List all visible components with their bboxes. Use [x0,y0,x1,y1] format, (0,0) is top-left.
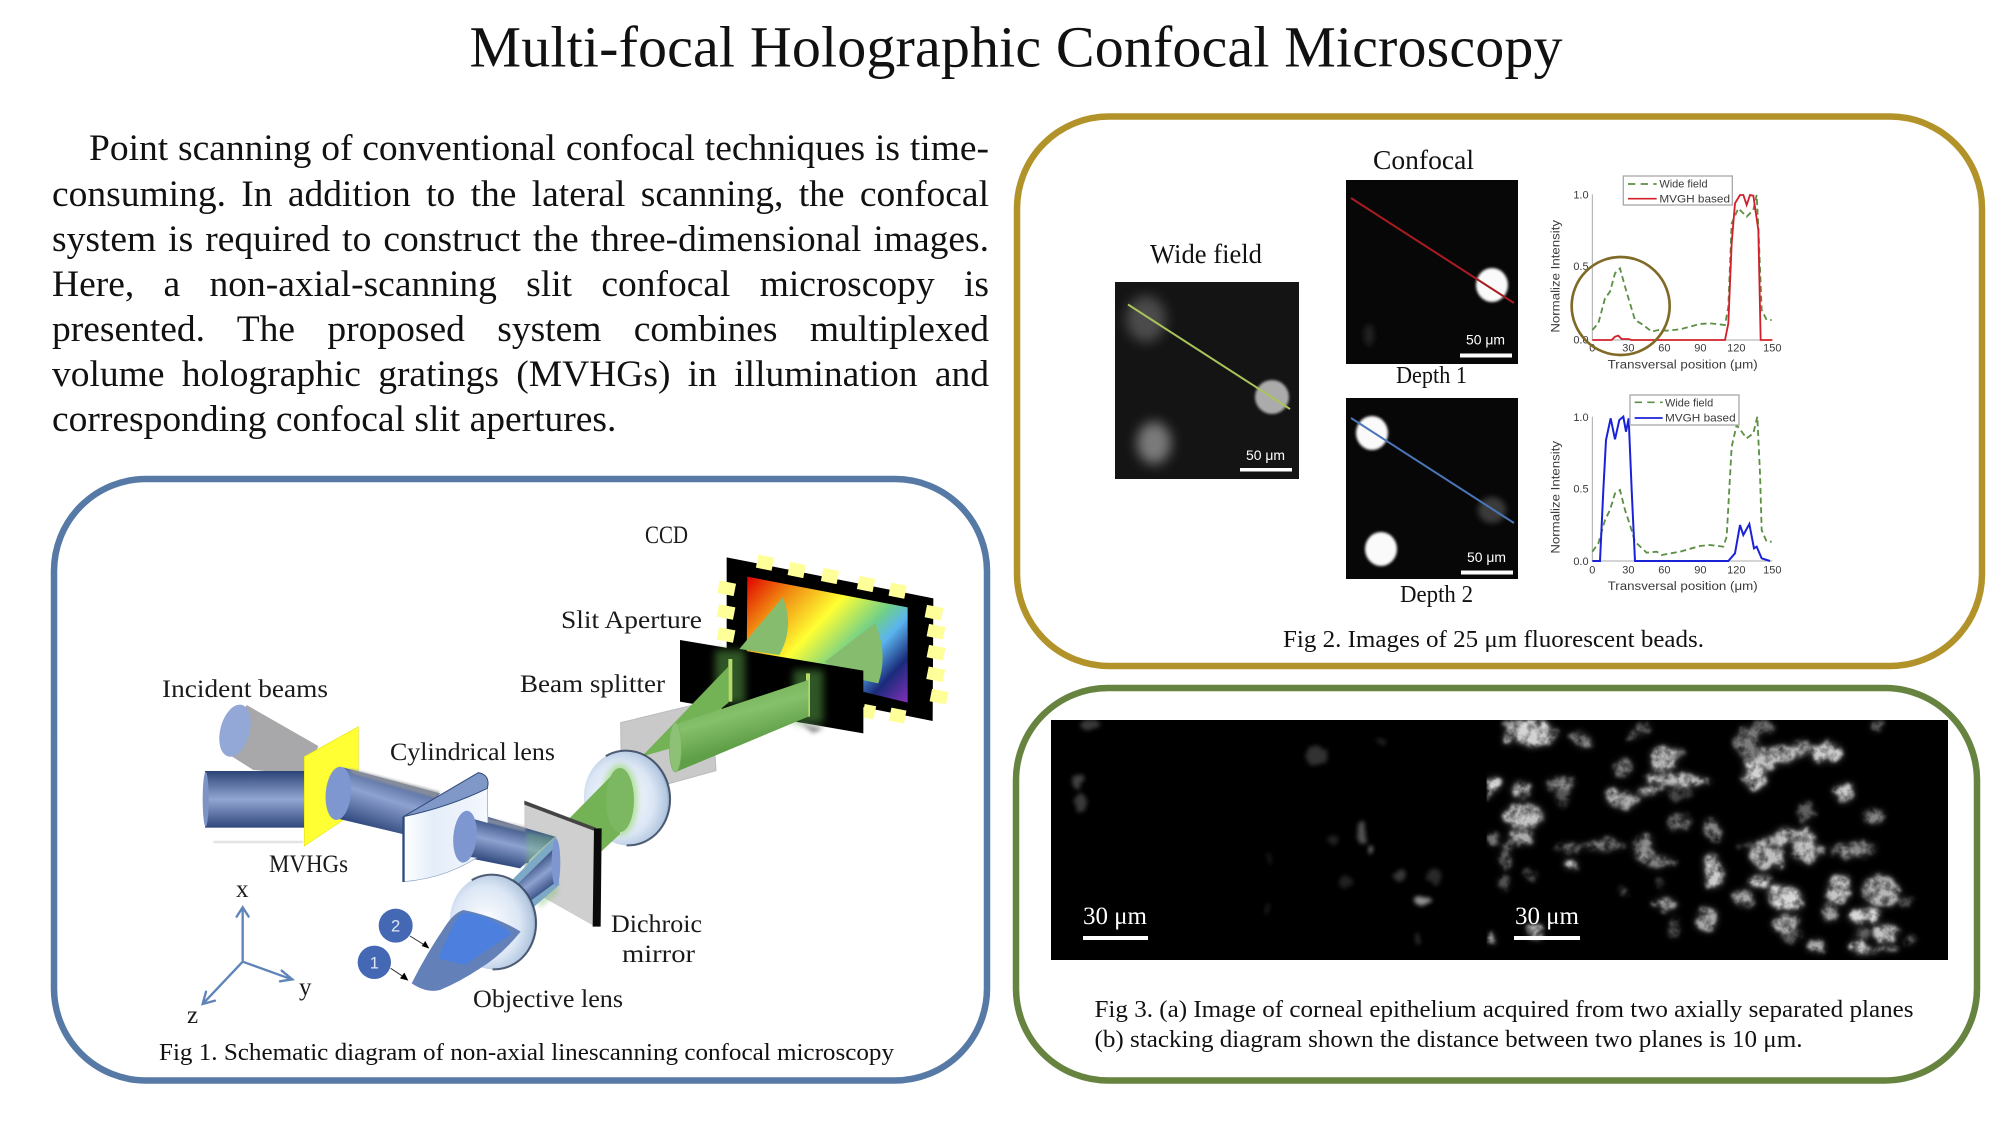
icon: cylindrical lens [402,773,558,908]
icon: folded beam [513,836,560,907]
chart: depth 1 intensity profile: 0.0 [1573,334,1589,346]
chart: depth 1 intensity profile: 30 [1622,343,1634,355]
chart: depth 2 intensity profile: Normalize Intensity [1548,441,1562,554]
image: confocal depth 1 [1346,180,1518,364]
diagram labels: Dichroic [611,911,702,938]
text block: introduction [52,128,989,440]
icon: lens 2 [550,745,676,862]
caption: fig 3: Fig 3. (a) Image of corneal epithelium acquired from two axially separated planes [1094,997,1914,1023]
chart: depth 1 intensity profile: Transversal position (μm) [1608,358,1758,372]
text block: introduction: corresponding confocal slit apertures. [52,399,616,440]
icon: slit aperture [680,640,863,733]
chart: depth 2 intensity profile: 90 [1694,564,1706,576]
diagram labels: Slit Aperture [561,607,702,634]
chart: depth 2 intensity profile: 0 [1589,564,1595,576]
chart: depth 2 intensity profile: 120 [1727,564,1745,576]
icon: beam after cylindrical lens [462,812,555,868]
chart: depth 1 intensity profile: MVGH based [1659,193,1730,205]
diagram labels: Objective lens [473,986,623,1013]
chart: depth 1 intensity profile: 120 [1727,343,1745,355]
image: wide field beads: 50 μm [1246,447,1285,463]
text block: introduction: Point scanning of conventional confocal techniques is time- [89,128,989,169]
chart: depth 1 intensity profile: 0 [1589,343,1595,355]
diagram: optical path [203,555,948,1004]
label: depth 1: Depth 1 [1396,363,1467,389]
title: Multi-focal Holographic Confocal Microscopy [470,14,1562,80]
icon: dichroic mirror [524,801,602,927]
chart: depth 1 intensity profile: 0.5 [1573,261,1589,273]
chart: depth 1 intensity profile: 150 [1763,343,1781,355]
text block: introduction: consuming. In addition to the lateral scanning, the confocal [52,174,989,214]
image: wide field beads [1115,282,1299,479]
chart: depth 1 intensity profile: 1.0 [1573,189,1589,201]
chart: depth 2 intensity profile: Transversal position (μm) [1608,579,1758,593]
chart: depth 1 intensity profile: Normalize Intensity [1548,220,1562,333]
icon: numbered markers [358,909,429,981]
image: corneal epithelium [1051,718,1948,960]
text block: introduction: presented. The proposed system combines multiplexed [52,309,989,350]
diagram labels: y [299,974,312,1001]
diagram labels: Cylindrical lens [390,739,555,766]
panel: fig 2 fluorescent beads [1017,116,1982,666]
icon: numbered markers: 1 [370,953,379,972]
diagram labels: mirror [622,941,696,968]
scale bar: left: 30 μm [1083,903,1148,930]
label: depth 2: Depth 2 [1400,582,1473,608]
chart: depth 2 intensity profile [1548,395,1781,593]
right plane speckles [1486,718,1917,954]
chart: depth 2 intensity profile: 150 [1763,564,1781,576]
chart: depth 2 intensity profile: MVGH based [1665,412,1736,424]
chart: depth 1 intensity profile [1548,176,1781,372]
image: confocal depth 1: 50 μm [1466,332,1505,348]
icon: objective lens [412,869,542,991]
caption: fig 2: Fig 2. Images of 25 μm fluorescent beads. [1283,627,1704,653]
diagram labels: Beam splitter [520,671,666,698]
panel: fig 1 schematic [54,479,987,1080]
heading: confocal: Confocal [1373,145,1474,175]
chart: depth 2 intensity profile: 1.0 [1573,412,1589,424]
text block: introduction: volume holographic gratings (MVHGs) in illumination and [52,354,989,394]
panel: fig 3 corneal epithelium [1016,688,1977,1080]
icon: MVHG plate [304,727,358,846]
caption: fig 3: (b) stacking diagram shown the distance between two planes is 10 μm. [1094,1027,1802,1053]
chart: depth 1 intensity profile: 60 [1658,343,1670,355]
icon: xyz axes [203,907,292,1004]
diagram labels [162,522,702,1029]
text block: introduction: Here, a non-axial-scanning slit confocal microscopy is [52,264,989,304]
chart: depth 2 intensity profile: 30 [1622,564,1634,576]
icon: numbered markers: 2 [391,917,400,936]
heading: wide field: Wide field [1150,239,1262,269]
chart: depth 2 intensity profile: 0.0 [1573,556,1589,568]
icon: beam splitter [621,667,808,797]
callout: circled region [1572,257,1670,355]
image: confocal depth 2: 50 μm [1467,549,1506,565]
chart: depth 2 intensity profile: 60 [1658,564,1670,576]
icon: beam to cylindrical lens [323,766,440,835]
chart: depth 1 intensity profile: Wide field [1659,178,1708,190]
text block: introduction: system is required to construct the three-dimensional images. [52,219,989,260]
image: confocal depth 2 [1346,398,1518,579]
caption: fig 1: Fig 1. Schematic diagram of non-axial linescanning confocal microscopy [159,1040,894,1066]
chart: depth 1 intensity profile: 90 [1694,343,1706,355]
diagram labels: CCD [645,522,688,549]
chart: depth 2 intensity profile: Wide field [1665,397,1713,409]
scale bar: right: 30 μm [1515,903,1580,930]
left plane speckles [1073,718,1442,943]
diagram labels: MVHGs [269,851,348,878]
icon: CCD sensor [717,555,948,724]
icon: incident beams [203,701,318,843]
caption: fig 3 [1094,997,1914,1053]
diagram labels: x [236,876,249,903]
chart: depth 2 intensity profile: 0.5 [1573,484,1589,496]
diagram labels: z [187,1002,198,1029]
diagram labels: Incident beams [162,676,328,703]
